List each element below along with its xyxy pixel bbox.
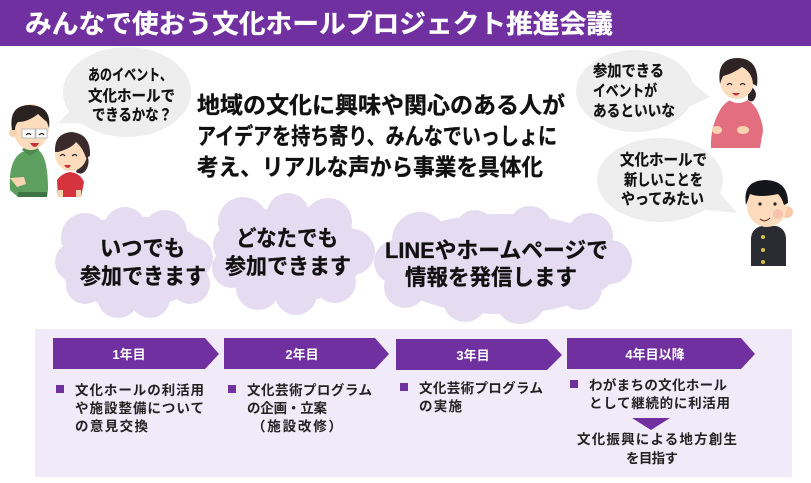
year 4 and beyond column: 4年目以降 xyxy=(625,347,685,362)
main message: 考え、リアルな声から事業を具体化 xyxy=(197,154,543,180)
title bar xyxy=(0,0,811,46)
year 1 column xyxy=(53,338,219,434)
year 3 column: の実施 xyxy=(419,398,462,414)
speech bubble: expectant mother: あるといいな xyxy=(593,102,675,120)
year 4 and beyond column: 文化振興による地方創生 xyxy=(577,431,737,447)
year 4 and beyond column: として継続的に利活用 xyxy=(589,395,730,411)
year 4 and beyond column: を目指す xyxy=(626,450,678,466)
cloud: anyone xyxy=(212,193,375,315)
speech bubble: student: 文化ホールで xyxy=(620,151,707,169)
year 4 and beyond column xyxy=(567,338,755,466)
year 1 column: 文化ホールの利活用 xyxy=(75,382,204,398)
speech bubble: student xyxy=(597,138,737,222)
speech bubble: expectant mother xyxy=(576,50,710,132)
main message: 地域の文化に興味や関心のある人が xyxy=(197,92,565,118)
cloud: LINE and website: LINEやホームページで xyxy=(385,238,608,263)
speech bubble: expectant mother: 参加できる xyxy=(593,62,664,80)
speech bubble: student: やってみたい xyxy=(621,190,704,208)
cloud: anytime: いつでも xyxy=(100,236,185,261)
speech bubble: parent and child: 文化ホールで xyxy=(88,87,175,105)
cloud: anytime: 参加できます xyxy=(80,264,206,289)
speech bubble: student: 新しいことを xyxy=(624,171,703,189)
year 1 column: の意見交換 xyxy=(75,418,148,434)
panel: timeline xyxy=(35,329,792,477)
speech bubble: parent and child xyxy=(58,47,191,137)
cloud: LINE and website xyxy=(374,206,632,324)
year 3 column xyxy=(396,339,562,414)
main message: アイデアを持ち寄り、みんなでいっしょに xyxy=(197,123,557,149)
cloud: anyone: 参加できます xyxy=(225,254,351,279)
icon: child xyxy=(55,132,90,197)
title bar: みんなで使おう文化ホールプロジェクト推進会議 xyxy=(25,9,613,39)
year 1 column: や施設整備について xyxy=(75,400,204,416)
year 2 column: （施設改修） xyxy=(252,418,342,434)
year 4 and beyond column: わがまちの文化ホール xyxy=(589,377,728,393)
cloud: LINE and website: 情報を発信します xyxy=(405,265,577,290)
speech bubble: parent and child: できるかな？ xyxy=(92,106,172,124)
cloud: anyone: どなたでも xyxy=(236,226,338,251)
cloud: anytime xyxy=(55,207,213,318)
year 3 column: 3年目 xyxy=(456,348,490,363)
year 2 column: 2年目 xyxy=(285,347,319,362)
main message xyxy=(197,92,565,180)
year 2 column: の企画・立案 xyxy=(247,400,328,416)
year 1 column: 1年目 xyxy=(112,347,146,362)
speech bubble: expectant mother: イベントが xyxy=(593,81,657,100)
year 2 column: 文化芸術プログラム xyxy=(247,382,372,398)
year 2 column xyxy=(224,338,389,434)
icon: student xyxy=(745,180,793,266)
speech bubble: parent and child: あのイベント、 xyxy=(88,66,172,84)
icon: father xyxy=(9,104,49,197)
icon: expectant mother xyxy=(711,58,763,148)
year 3 column: 文化芸術プログラム xyxy=(419,380,543,396)
